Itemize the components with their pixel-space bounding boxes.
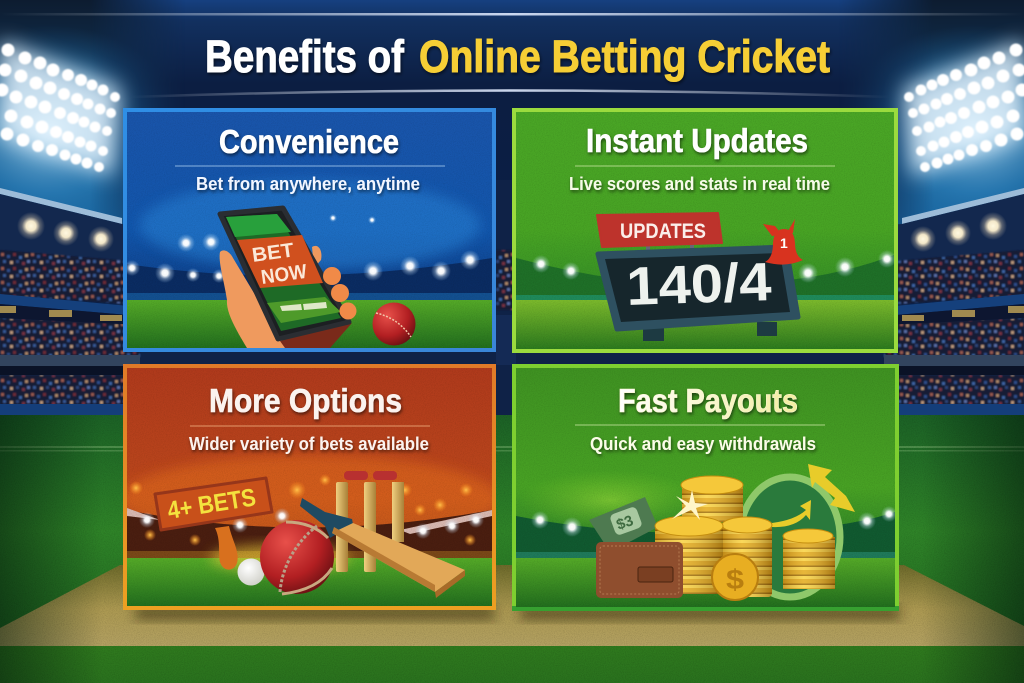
icon: banknotes	[589, 497, 658, 552]
icon: notification bell: 1	[780, 235, 788, 251]
panel: instant updates	[512, 108, 898, 353]
icon: updates sign	[597, 213, 722, 252]
icon: cricket ball	[372, 302, 416, 346]
heading: fast payouts: Fast Payouts	[618, 382, 798, 419]
icon: growth arrows	[772, 464, 855, 527]
icon: updates sign: UPDATES	[620, 220, 706, 243]
icon: coin stacks	[655, 476, 835, 597]
icon: stumps	[336, 471, 404, 572]
panel: more options	[120, 364, 500, 610]
icon: phone in hand: BET	[251, 239, 295, 267]
icon: dollar coin: $	[726, 564, 744, 595]
icon: phone in hand	[220, 208, 356, 348]
icon: banknotes: $3	[614, 512, 636, 534]
heading: more options: More Options	[209, 382, 402, 419]
icon: scoreboard: 140/4	[625, 252, 772, 317]
icon: cricket bat	[300, 498, 465, 598]
icon: green ring	[740, 477, 840, 597]
icon: red cricket ball	[260, 520, 334, 594]
title	[205, 31, 830, 82]
subtitle: fast payouts: Quick and easy withdrawals	[590, 434, 816, 454]
panel: convenience	[123, 108, 496, 352]
icon: scoreboard	[598, 247, 798, 341]
icon: white ball	[238, 558, 264, 586]
icon: dollar coin	[712, 554, 758, 600]
icon: bets sign: 4+ BETS	[166, 483, 258, 525]
icon: wallet	[596, 542, 683, 598]
title: Online Betting Cricket	[419, 31, 830, 82]
title: Benefits of	[205, 31, 405, 82]
heading: instant updates: Instant Updates	[586, 122, 808, 159]
icon: notification bell	[763, 219, 803, 265]
heading: convenience: Convenience	[219, 123, 399, 160]
panel: fast payouts	[512, 364, 899, 611]
subtitle: instant updates: Live scores and stats in real time	[569, 174, 830, 194]
icon: bets sign	[155, 478, 272, 570]
subtitle: more options: Wider variety of bets available	[189, 434, 429, 454]
subtitle: convenience: Bet from anywhere, anytime	[196, 174, 420, 194]
icon: phone in hand: NOW	[260, 261, 308, 289]
